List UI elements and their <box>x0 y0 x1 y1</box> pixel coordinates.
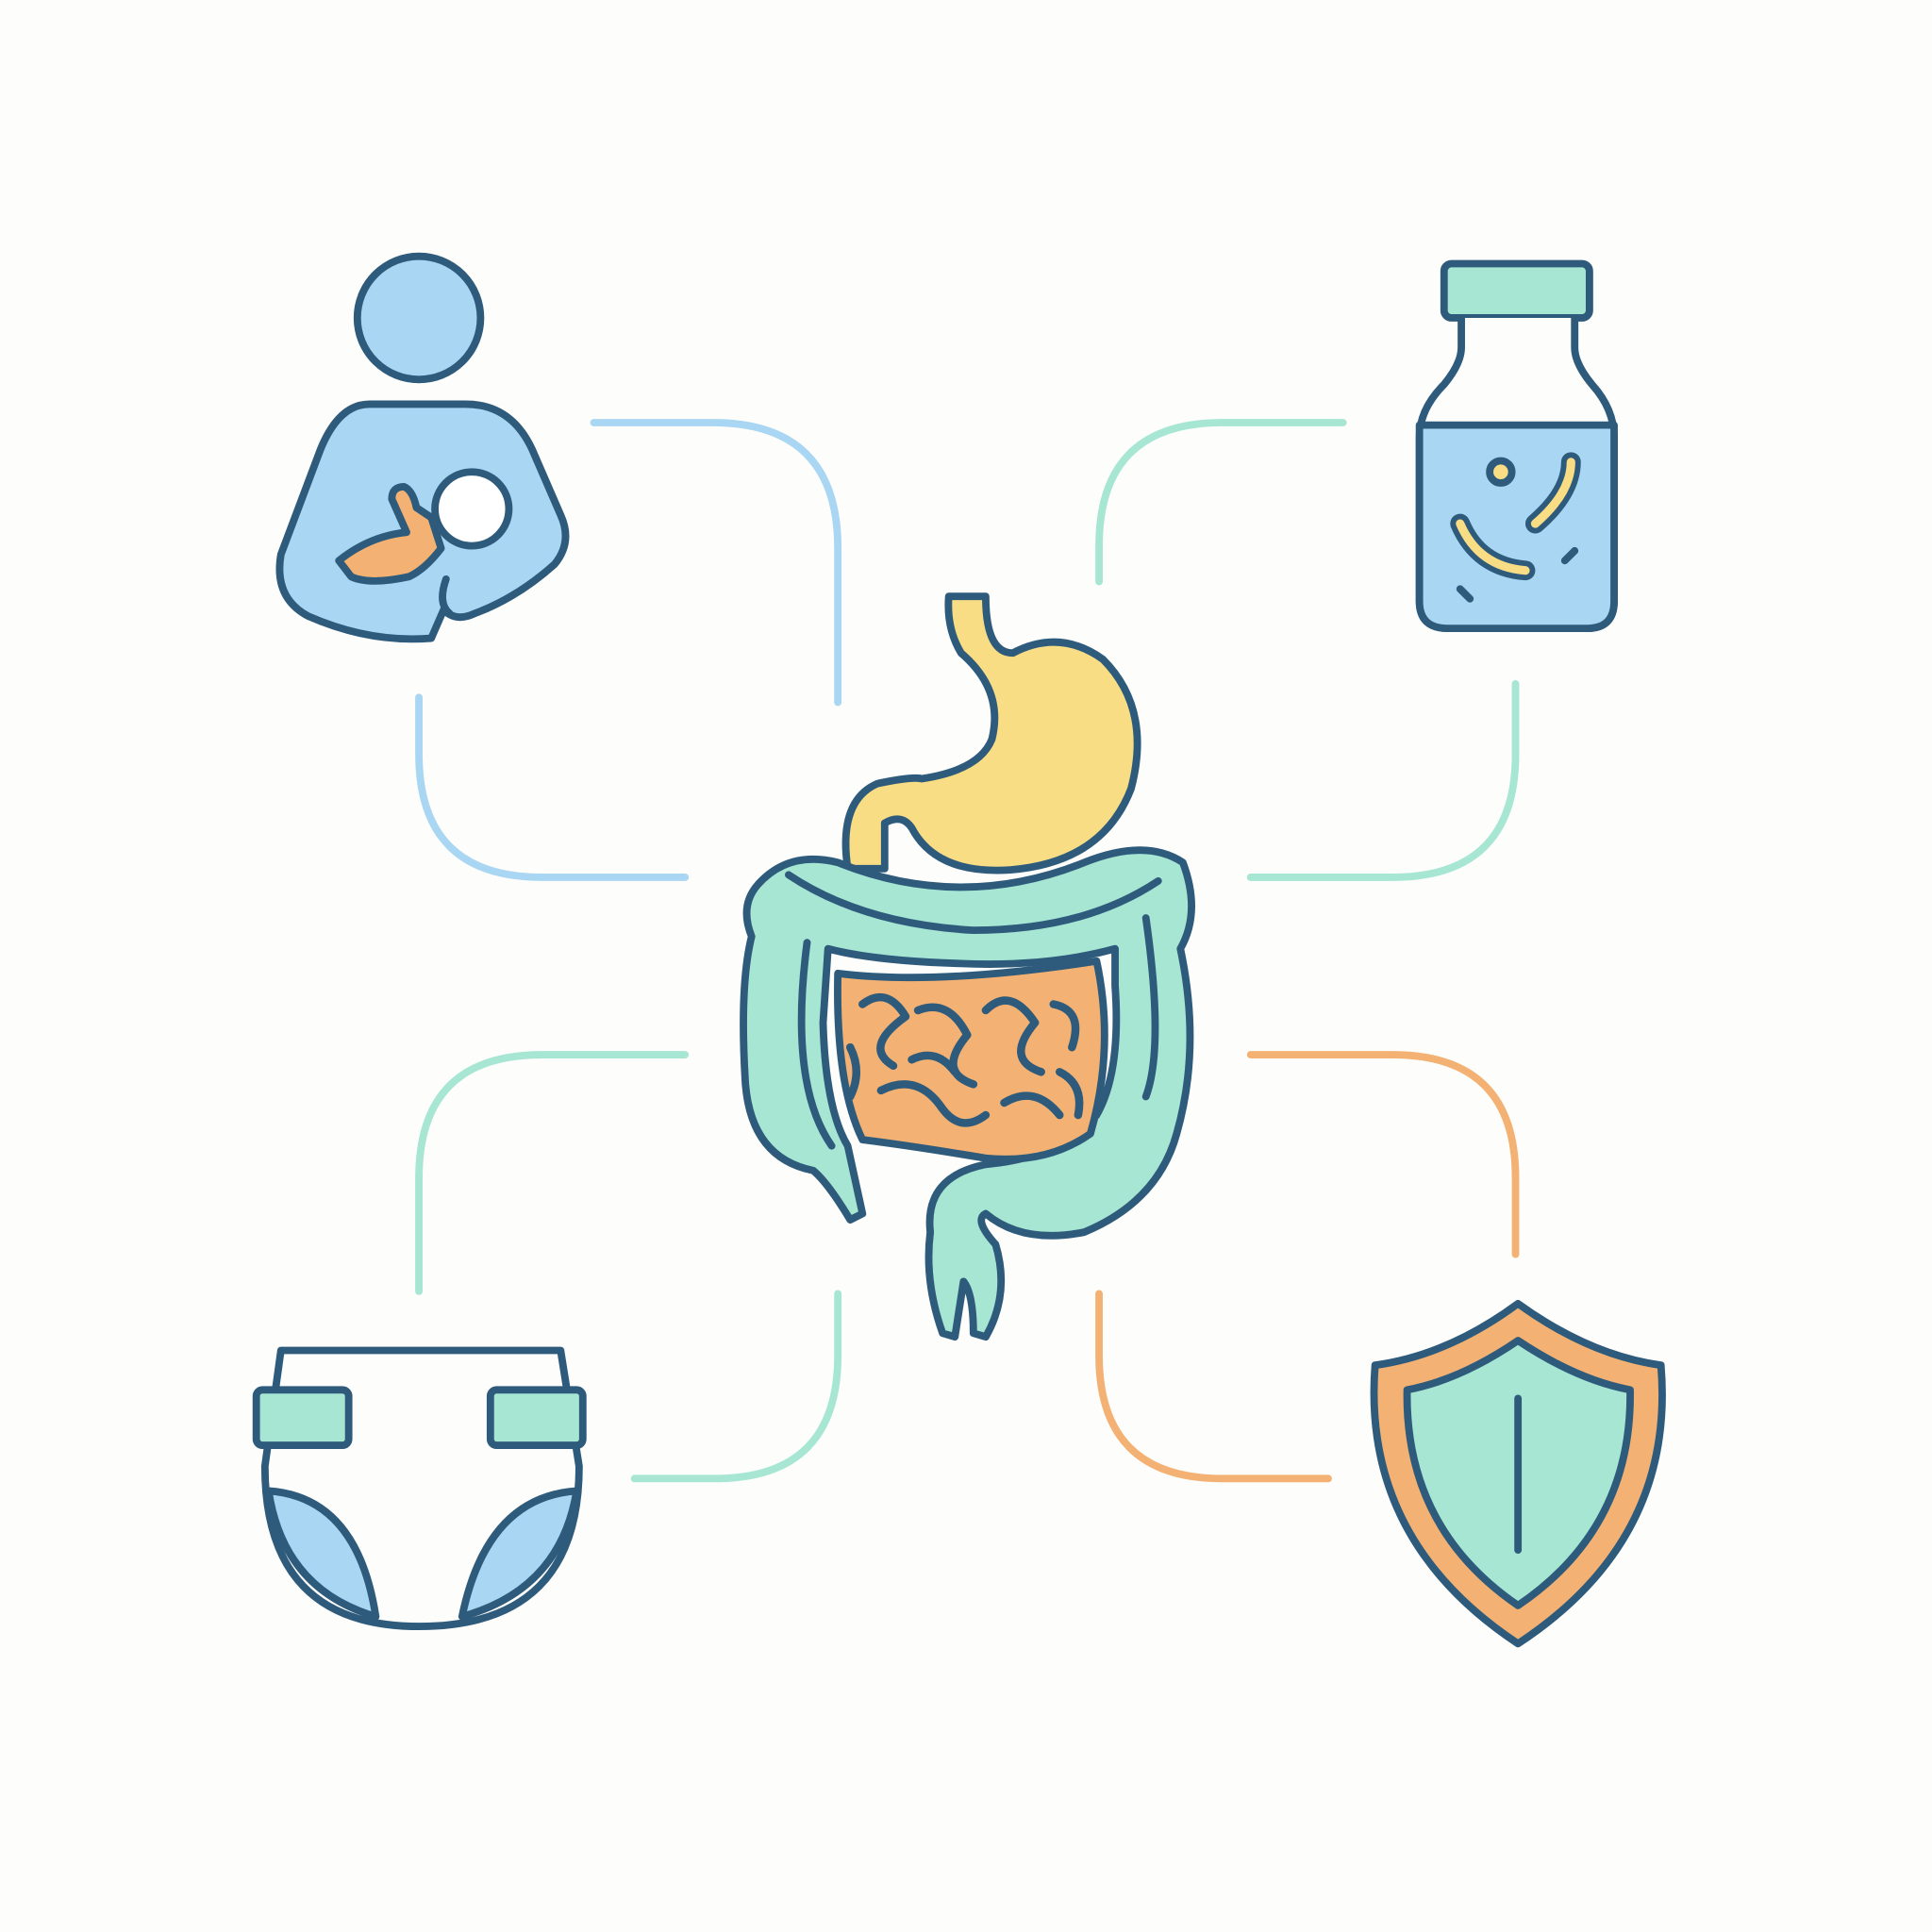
icon: digestive tract <box>743 596 1191 1337</box>
connectors: top-right <box>1099 423 1516 877</box>
icon: diaper <box>257 1351 583 1626</box>
small intestine <box>838 961 1105 1159</box>
connectors: top-left <box>419 423 838 877</box>
icon: shield <box>1374 1304 1662 1643</box>
icon: parent holding baby <box>279 257 566 639</box>
connectors: bottom-left <box>419 1055 838 1478</box>
icon: probiotic bottle <box>1420 264 1614 628</box>
connectors: bottom-right <box>1099 1055 1516 1478</box>
colon <box>743 850 1191 1337</box>
stomach <box>846 596 1138 871</box>
